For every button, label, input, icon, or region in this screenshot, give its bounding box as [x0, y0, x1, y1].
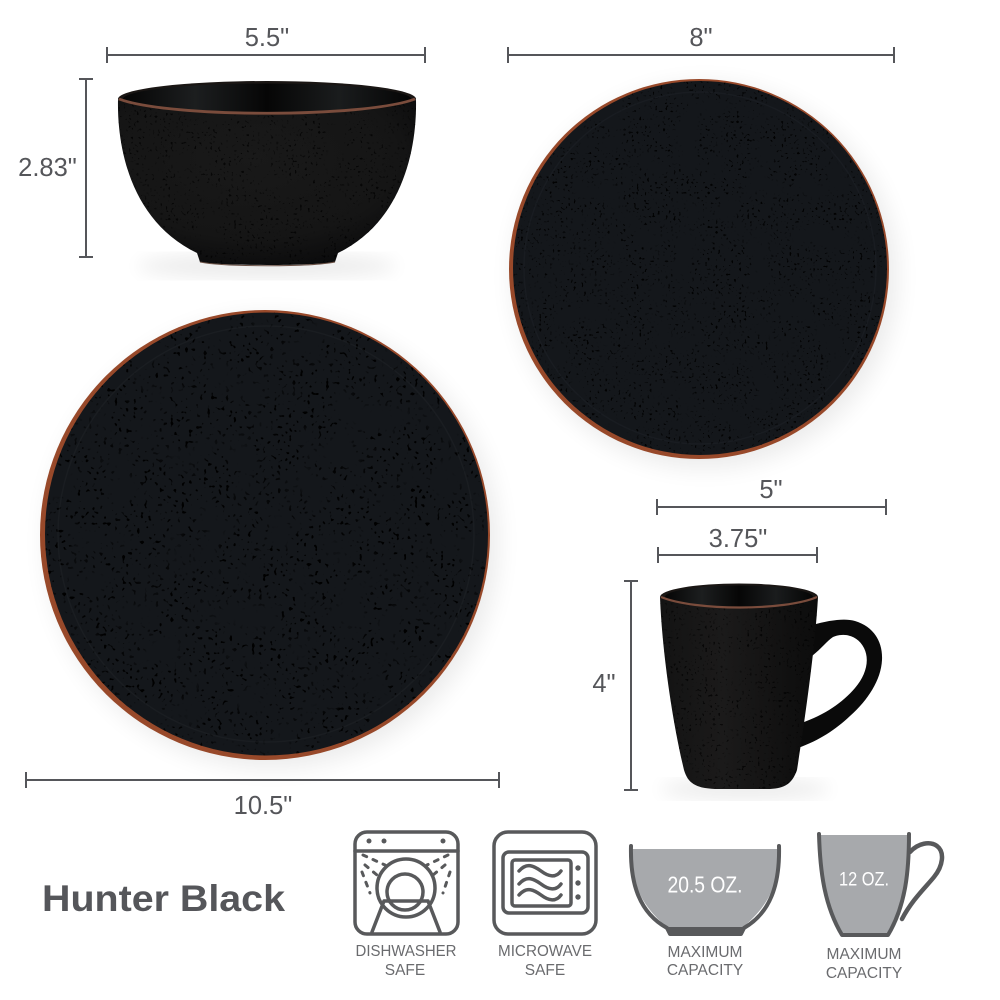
label: microwave safe: MICROWAVE	[498, 943, 592, 960]
icon: microwave safe	[494, 832, 596, 934]
dimension: bowl height 2.83 inches	[18, 79, 93, 258]
dimension: mug with handle 5 inches	[656, 476, 887, 515]
dinner plate photo	[40, 310, 498, 768]
dimension: mug diameter 3.75 inches: 3.75"	[709, 525, 767, 553]
dimension: bowl height 2.83 inches: 2.83"	[18, 154, 77, 182]
icon: bowl capacity 20.5 oz: 20.5 OZ.	[668, 872, 742, 898]
icon: mug capacity 12 oz: 12 OZ.	[839, 868, 889, 890]
label: microwave safe	[498, 943, 592, 979]
salad plate photo	[509, 79, 897, 468]
dimension: dinner plate 10.5 inches	[25, 772, 500, 820]
dimension: salad plate 8 inches	[507, 24, 895, 63]
dimension: bowl width 5.5 inches: 5.5"	[245, 24, 289, 52]
title: Hunter Black: Hunter Black	[42, 877, 285, 919]
dimension: mug height 4 inches: 4"	[592, 670, 616, 698]
dimension: salad plate 8 inches: 8"	[689, 24, 713, 52]
label: mug maximum capacity: CAPACITY	[826, 965, 902, 982]
dimension: mug height 4 inches	[592, 581, 638, 790]
label: mug maximum capacity: MAXIMUM	[827, 946, 901, 963]
icon: dishwasher safe	[355, 832, 458, 934]
label: mug maximum capacity	[826, 946, 902, 982]
dimension: mug with handle 5 inches: 5"	[759, 476, 783, 504]
icon: bowl capacity 20.5 oz	[631, 846, 779, 935]
label: dishwasher safe: DISHWASHER	[356, 943, 456, 960]
dimension: dinner plate 10.5 inches: 10.5"	[234, 792, 292, 820]
label: bowl maximum capacity	[667, 944, 743, 979]
label: bowl maximum capacity: MAXIMUM	[668, 944, 742, 961]
dimension: bowl width 5.5 inches	[106, 24, 426, 63]
label: bowl maximum capacity: CAPACITY	[667, 962, 743, 979]
mug photo	[660, 584, 882, 799]
dimension: mug diameter 3.75 inches	[657, 525, 818, 563]
label: dishwasher safe	[356, 943, 456, 979]
label: dishwasher safe: SAFE	[385, 962, 425, 979]
bowl photo	[118, 81, 416, 278]
icon: mug capacity 12 oz	[819, 834, 942, 935]
label: microwave safe: SAFE	[525, 962, 565, 979]
